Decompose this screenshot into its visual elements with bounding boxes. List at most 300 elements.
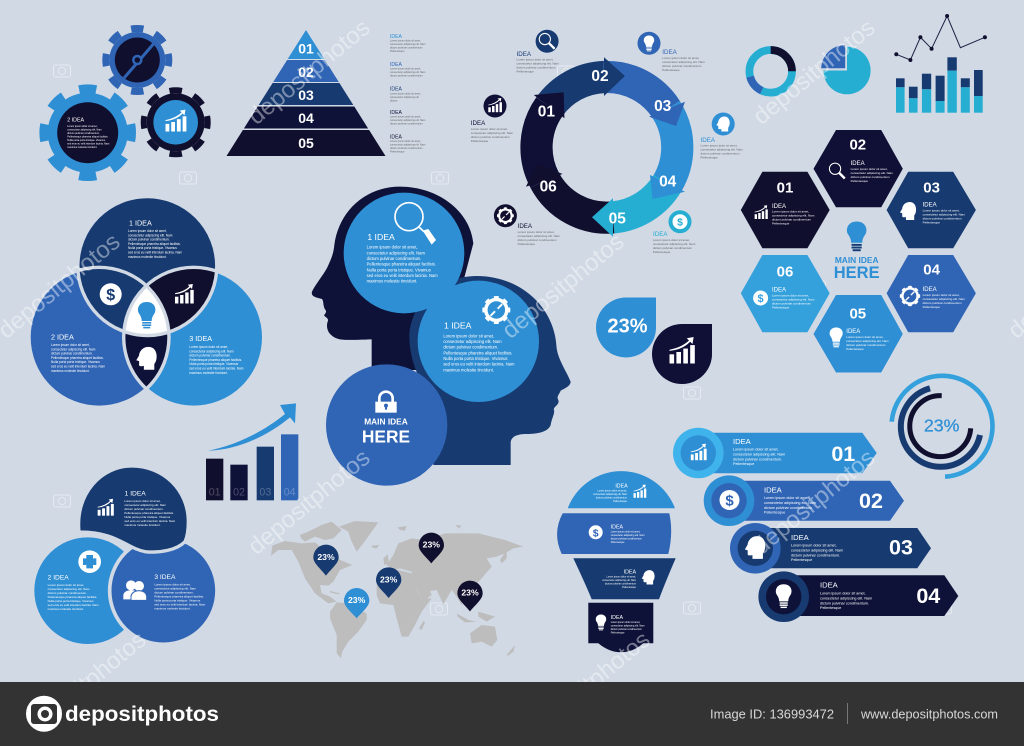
banner 02 [704, 475, 904, 526]
venn text 2: 2 IDEA [51, 332, 74, 342]
bulb: neck [573, 558, 676, 599]
growth bars with arrow: 01 [209, 486, 221, 498]
hexagon centre: main idea: HERE [834, 264, 880, 282]
hexagon diagram [741, 130, 976, 372]
hex 04: IDEA [923, 287, 937, 293]
circle: idea right: dictum pulvinar condimentum. [443, 345, 498, 350]
map pin: south america: 23% [348, 595, 366, 605]
blob 1 text: maximus molestie tincidunt. [124, 523, 161, 527]
bulb: dome: IDEA [615, 484, 628, 490]
hex 06: Pellentesque [772, 306, 790, 310]
pyramid labels: dictum pulvinar condimentum [390, 147, 423, 150]
hex 04: consectetur adipiscing elit. Nam [923, 297, 965, 301]
gear: big with text [44, 89, 132, 177]
callout: bulb: IDEA [662, 49, 678, 56]
hex 04: Pellentesque [923, 305, 940, 309]
banner 03: IDEA [791, 533, 810, 542]
teardrop percentage: 23% [607, 316, 648, 338]
callout: magnifier: consectetur adipiscing elit. Nam [516, 62, 559, 66]
hex 02: 02 [849, 137, 866, 154]
left head silhouette [312, 187, 473, 370]
hex 06 [741, 255, 830, 332]
watermarks: depositphotos [523, 626, 655, 742]
venn text 2: Pellentesque pharetra aliquet facilisis. [51, 356, 104, 360]
callout: chart [471, 94, 514, 143]
hex 01: dictum pulvinar condimentum [772, 218, 812, 222]
pyramid labels: dictum pulvinar condimentum [390, 122, 423, 126]
hex 04: 04 [923, 262, 941, 279]
map pin: africa: 23% [380, 575, 398, 585]
callout: magnifier [516, 30, 559, 74]
banner 02: Lorem ipsum dolor sit amet, [764, 496, 810, 500]
hex 02 [814, 130, 903, 207]
cycle callouts [471, 30, 743, 254]
blob 2 text: Nulla porta porta tristique. Vivamus [48, 599, 94, 603]
pyramid labels: consectetur adipiscing elit. Nam [390, 43, 425, 46]
hex 02: dictum pulvinar condimentum [851, 175, 890, 179]
callout: dollar: IDEA [653, 231, 668, 238]
blob 3 text: Pellentesque pharetra aliquet facilisis. [154, 594, 204, 598]
circle: main idea: HERE [362, 427, 410, 447]
venn text 3: 3 IDEA [189, 334, 212, 343]
venn text 3: Lorem ipsum dolor sit amet, [189, 345, 228, 349]
banner 02: dictum pulvinar condimentum. [764, 506, 813, 510]
gear: dark with chart [144, 90, 208, 154]
hex 05 [814, 295, 903, 372]
circle: idea top: Lorem ipsum dolor sit amet, [367, 245, 418, 250]
callout: magnifier: Lorem ipsum dolor sit amet, [516, 58, 554, 62]
circle: idea top: maximus molestie tincidunt. [367, 279, 417, 284]
bulb: body: Lorem ipsum dolor sit amet, [611, 530, 641, 534]
bulb: body: dictum pulvinar condimentum [611, 538, 642, 540]
callout: bulb: Pellentesque [662, 68, 680, 72]
circle: idea right: Pellentesque pharetra aliquet facilisis. [443, 350, 513, 355]
gauge 23% [892, 376, 992, 477]
pyramid chart: 04 [298, 110, 314, 126]
circular arrow cycle: 03 [654, 98, 672, 115]
circle: idea top: consectetur adipiscing elit. Nam [367, 250, 425, 255]
right head silhouette [409, 276, 571, 465]
pyramid labels: Lorem ipsum dolor sit amet, [390, 40, 421, 42]
circle: idea right [418, 281, 539, 402]
callout: dollar [653, 210, 696, 254]
banner 01: 01 [831, 442, 855, 466]
growth bars with arrow: 04 [284, 486, 296, 498]
venn text 3: sed eros eu velit interdum lacinia. Nam [189, 366, 244, 370]
banner 02: $ [725, 492, 734, 510]
gear: big with text: consectetur adipiscing elit. Nam [67, 128, 102, 132]
blob 2 text: Lorem ipsum dolor sit amet, [48, 583, 84, 587]
callout: gear [494, 204, 560, 246]
bulb: base: consectetur adipiscing elit. Nam [611, 624, 644, 628]
gear: big with text: dictum pulvinar condimentum. [67, 132, 100, 135]
callout: dollar: dictum pulvinar condimentum [653, 246, 693, 250]
map pin: russia: 23% [423, 540, 440, 550]
venn icons: $ [106, 287, 115, 304]
pyramid labels: IDEA [390, 34, 402, 40]
banner 04: dictum pulvinar condimentum. [820, 601, 869, 605]
banner 02: IDEA [764, 486, 783, 494]
bulb: base [588, 603, 653, 652]
circle: idea top: Nulla porta porta tristique. Vivamus [367, 267, 431, 272]
callout: dollar: Lorem ipsum dolor sit amet, [653, 238, 690, 242]
banner 01 [673, 428, 877, 478]
callout: bulb: consectetur adipiscing elit. Nam [662, 60, 705, 64]
gear: blue compass [106, 28, 169, 92]
bulb: dome: Pellentesque [613, 500, 628, 503]
circle: idea right: maximus molestie tincidunt. [443, 367, 494, 372]
pyramid labels [390, 34, 425, 154]
pyramid labels: dictum [390, 100, 397, 102]
venn text 1: consectetur adipiscing elit. Nam [128, 233, 173, 237]
map pin: south asia: 23% [461, 588, 479, 598]
blob 1 text: consectetur adipiscing elit. Nam [124, 503, 167, 507]
bulb: base: IDEA [611, 615, 624, 621]
bulb: dome: Lorem ipsum dolor sit amet, [598, 490, 627, 492]
gear: big with text: Nulla porta porta tristique. Vivamus [67, 139, 106, 142]
watermarks: depositphotos [243, 444, 375, 560]
callout: bulb: dictum pulvinar condimentum [662, 64, 702, 68]
circular arrow cycle: 06 [540, 179, 557, 196]
hex 05: dictum pulvinar condimentum [846, 343, 886, 347]
hex 06: IDEA [772, 288, 786, 294]
bulb: neck: Pellentesque [622, 586, 637, 589]
circle: idea right: Lorem ipsum dolor sit amet, [443, 333, 494, 338]
watermarks: depositphotos [748, 14, 880, 130]
callout: bulb: Lorem ipsum dolor sit amet, [662, 56, 699, 60]
hex 03: Lorem ipsum dolor sit amet, [923, 208, 960, 212]
circle: idea right: Nulla porta porta tristique. Vivamus [443, 356, 507, 361]
callout: head: Lorem ipsum dolor sit amet, [700, 144, 738, 148]
circle: idea top: sed eros eu velit interdum lacinia. Nam [367, 273, 438, 278]
hex 06: Lorem ipsum dolor sit amet, [772, 294, 809, 298]
callout: chart: consectetur adipiscing elit. Nam [471, 131, 514, 135]
bulb: dome: dictum pulvinar condimentum [596, 496, 627, 500]
blob 3 text: maximus molestie tincidunt. [154, 606, 191, 610]
callout: bulb [638, 32, 705, 72]
hex 03 [887, 172, 976, 248]
pyramid labels: Lorem ipsum dolor sit amet, [390, 140, 421, 143]
hexagon centre: main idea [834, 221, 880, 282]
venn text 3: Pellentesque pharetra aliquet facilisis. [189, 358, 242, 362]
banner 01: dictum pulvinar condimentum. [733, 457, 782, 461]
circular arrow cycle: 01 [538, 103, 555, 120]
hex 04: Lorem ipsum dolor sit amet, [923, 293, 960, 297]
blob 2 text: 2 IDEA [48, 575, 69, 582]
blob 1 text: Pellentesque pharetra aliquet facilisis. [124, 511, 174, 515]
venn text 2: Nulla porta porta tristique. Vivamus [51, 360, 100, 364]
hex 03: dictum pulvinar condimentum [923, 216, 962, 220]
pyramid labels: Lorem ipsum dolor sit amet, [390, 116, 421, 118]
pyramid labels: dictum pulvinar condimentum [390, 46, 423, 50]
banner 02: Pellentesque [764, 511, 785, 515]
venn text 3: consectetur adipiscing elit. Nam [189, 349, 234, 353]
pyramid labels: consectetur adipiscing elit [390, 96, 419, 99]
venn text 1 [128, 218, 182, 259]
pyramid labels: Pellentesque [390, 50, 405, 53]
blob 3 text [123, 574, 206, 610]
map pin: south asia [457, 581, 483, 611]
blob 1 text: Nulla porta porta tristique. Vivamus [124, 515, 171, 519]
circle: main idea [326, 364, 447, 486]
hex 02: Pellentesque [851, 179, 868, 183]
hex 03: IDEA [923, 202, 937, 208]
hex 03: Pellentesque [923, 220, 940, 224]
venn text 2 [51, 332, 105, 373]
banner 04: Lorem ipsum dolor sit amet, [820, 592, 866, 596]
circular arrow cycle [526, 57, 685, 237]
callout: chart: IDEA [471, 120, 486, 127]
banner 03: Lorem ipsum dolor sit amet, [791, 544, 836, 548]
callout: chart: Pellentesque [471, 139, 488, 143]
hex 06: $ [758, 293, 764, 305]
pyramid labels: Lorem ipsum dolor sit amet, [390, 68, 421, 70]
banner 01: Lorem ipsum dolor sit amet, [733, 448, 778, 452]
banner 03: consectetur adipiscing elit. Nam [791, 548, 843, 552]
pyramid labels: dictum pulvinar condimentum [390, 74, 423, 78]
bulb: neck: Lorem ipsum dolor sit amet, [606, 576, 636, 578]
blob 2 text [48, 550, 101, 611]
venn text 1: 1 IDEA [129, 218, 152, 228]
callout: head: IDEA [700, 137, 716, 144]
banner 04: 04 [916, 584, 940, 608]
hex 01 [741, 172, 830, 248]
circle: idea right: 1 IDEA [444, 321, 472, 331]
banner 03: 03 [889, 536, 913, 560]
growth bars with arrow: 02 [233, 486, 245, 498]
blob 3 text: sed eros eu velit interdum lacinia. Nam [154, 602, 206, 606]
gear: big with text: 2 IDEA [67, 118, 85, 124]
pyramid labels: IDEA [390, 62, 402, 68]
bulb: body [557, 513, 671, 554]
venn text 1: Lorem ipsum dolor sit amet, [128, 229, 167, 233]
bulb: neck: consectetur adipiscing elit. Nam [602, 579, 636, 582]
pyramid labels: Lorem ipsum dolor sit amet, [390, 92, 421, 96]
bulb: base: dictum pulvinar condimentum [611, 628, 642, 631]
hex 06: dictum pulvinar condimentum [772, 302, 812, 306]
callout: gear: Pellentesque [518, 242, 535, 246]
callout: magnifier: IDEA [516, 51, 532, 58]
bulb: neck: IDEA [624, 570, 636, 576]
hexagon centre: main idea: MAIN IDEA [835, 255, 879, 265]
pyramid chart: 05 [298, 135, 314, 151]
watermarks: depositphotos [243, 14, 375, 130]
circle: idea top: 1 IDEA [367, 232, 395, 242]
banner 02: 02 [859, 489, 883, 513]
footer logo icon [26, 696, 62, 732]
hex 05: IDEA [846, 329, 860, 335]
map pin: africa [376, 567, 401, 598]
blob 2 text: Pellentesque pharetra aliquet facilisis. [48, 595, 97, 599]
blob 3 text: consectetur adipiscing elit. Nam [154, 586, 197, 590]
hex 04 [887, 255, 976, 332]
callout: chart: dictum pulvinar condimentum [471, 135, 510, 139]
growth bars with arrow [206, 403, 298, 500]
banner 03: Pellentesque [791, 558, 812, 562]
circle: idea right: sed eros eu velit interdum lacinia. Nam [443, 362, 515, 367]
bulb: body: Pellentesque [611, 541, 625, 544]
hex 03: 03 [923, 180, 940, 197]
lower-left group in zoom coordinates [34, 403, 523, 658]
venn diagram [29, 196, 264, 407]
three blob diagram [34, 466, 217, 644]
banner 04: Pellentesque [820, 606, 841, 610]
callout: gear: Lorem ipsum dolor sit amet, [518, 230, 555, 234]
circle: idea top [344, 193, 464, 313]
circle: main idea: MAIN IDEA [364, 417, 408, 427]
teardrop chart icon [652, 324, 712, 384]
circle: idea top: dictum pulvinar condimentum. [367, 256, 421, 261]
pyramid labels: IDEA [390, 110, 402, 116]
banner 01: IDEA [733, 437, 752, 446]
blob 1 text: Lorem ipsum dolor sit amet, [124, 499, 161, 503]
callout: gear: dictum pulvinar condimentum [518, 238, 557, 242]
callout: magnifier: Pellentesque [516, 70, 534, 74]
banner 04: IDEA [820, 580, 839, 590]
hex 02: IDEA [851, 161, 865, 167]
callout: dollar: $ [677, 216, 683, 228]
map pin: north america: 23% [317, 552, 335, 562]
circle: idea top: Pellentesque pharetra aliquet facilisis. [367, 262, 436, 267]
world map [271, 521, 523, 658]
footer image id: Image ID: 136993472 [710, 708, 834, 722]
pyramid chart [226, 30, 386, 156]
callout: head: dictum pulvinar condimentum [700, 152, 740, 156]
footer logo text: depositphotos [65, 702, 219, 726]
map pin: south america [344, 588, 369, 618]
footer site url: www.depositphotos.com [860, 708, 998, 722]
callout: head [700, 112, 743, 160]
hex 02: consectetur adipiscing elit. Nam [851, 171, 893, 175]
hex 01: 01 [777, 180, 793, 197]
callout: head: Pellentesque [700, 156, 718, 160]
footer bar [0, 682, 1024, 746]
blob 2 text: maximus molestie tincidunt. [48, 607, 84, 611]
pyramid labels: Pellentesque [390, 150, 405, 154]
bulb: base: Lorem ipsum dolor sit amet, [611, 621, 641, 624]
circular arrow cycle: 04 [659, 174, 677, 191]
banner 03 [730, 523, 931, 574]
hex 06: consectetur adipiscing elit. Nam [772, 298, 815, 302]
gear: big with text: sed eros eu velit interdum lacinia. Nam [67, 142, 109, 146]
bulb: base: Pellentesque [611, 632, 625, 634]
banner 02: consectetur adipiscing elit. Nam [764, 501, 816, 505]
pyramid chart: 01 [298, 40, 314, 56]
pyramid labels: consectetur adipiscing elit. Nam [390, 71, 425, 74]
venn text 3: dictum pulvinar condimentum. [189, 354, 231, 358]
venn text 3: Nulla porta porta tristique. Vivamus [189, 362, 239, 366]
gears cluster [44, 28, 208, 177]
watermarks: depositphotos [748, 444, 880, 560]
hex 05: Lorem ipsum dolor sit amet, [846, 335, 883, 339]
venn text 2: Lorem ipsum dolor sit amet, [51, 343, 90, 347]
two heads diagram [312, 187, 571, 486]
hex 01: IDEA [772, 204, 786, 210]
gauge 23%: 23% [924, 416, 960, 436]
donut chart [749, 50, 792, 93]
circle: idea right: consectetur adipiscing elit. Nam [443, 339, 502, 344]
map pin: north america [313, 545, 339, 576]
blob 1 text: 1 IDEA [125, 491, 146, 498]
hex 01: Lorem ipsum dolor sit amet, [772, 210, 809, 214]
venn text 2: maximus molestie tincidunt. [51, 369, 90, 373]
blob 2 text: dictum pulvinar condimentum. [48, 591, 87, 595]
blob 3 text: Nulla porta porta tristique. Vivamus [154, 598, 201, 602]
blob 1 text [98, 491, 176, 527]
hex 03: consectetur adipiscing elit. Nam [923, 212, 965, 216]
banner 03: dictum pulvinar condimentum. [791, 553, 840, 557]
pyramid labels: consectetur adipiscing elit. Nam [390, 144, 425, 146]
banner 01: Pellentesque [733, 462, 754, 466]
hex 04: dictum pulvinar condimentum [923, 301, 962, 305]
pyramid chart: 03 [298, 87, 314, 103]
venn text 3: maximus molestie tincidunt. [189, 371, 228, 375]
blob 1 text: dictum pulvinar condimentum. [124, 507, 164, 511]
blob 2 text: sed eros eu velit interdum lacinia. Nam [48, 603, 99, 607]
venn text 2: sed eros eu velit interdum lacinia. Nam [51, 364, 105, 368]
venn text 1: maximus molestie tincidunt. [128, 255, 167, 259]
gear: big with text: Lorem ipsum dolor sit amet, [67, 125, 98, 128]
pyramid chart: 02 [298, 64, 314, 80]
growth bars with arrow: 03 [259, 486, 271, 498]
callout: chart: Lorem ipsum dolor sit amet, [471, 127, 508, 131]
venn text 2: dictum pulvinar condimentum. [51, 352, 93, 356]
pyramid labels: IDEA [390, 87, 402, 93]
circular arrow cycle: 05 [609, 210, 626, 227]
blob 3 text: Lorem ipsum dolor sit amet, [154, 582, 191, 586]
venn text 3 [189, 334, 244, 375]
bulb: dome [568, 471, 675, 508]
hex 05: consectetur adipiscing elit. Nam [846, 339, 889, 343]
banner 04 [758, 571, 958, 622]
pie chart [821, 45, 871, 94]
watermarks: depositphotos [19, 626, 151, 742]
venn text 1: sed eros eu velit interdum lacinia. Nam [128, 250, 182, 254]
hex 05: 05 [849, 306, 866, 323]
callout: dollar: consectetur adipiscing elit. Nam [653, 242, 696, 246]
gear: big with text: Pellentesque pharetra aliquet facilisis. [67, 136, 109, 138]
map pin: russia [419, 533, 444, 563]
blob 3 text: dictum pulvinar condimentum. [154, 590, 194, 594]
blob 2 text: consectetur adipiscing elit. Nam [48, 587, 90, 591]
callout: dollar: Pellentesque [653, 250, 671, 254]
callout: gear: IDEA [518, 223, 533, 230]
bulb: body: consectetur adipiscing elit. Nam [611, 534, 644, 537]
hex 01: Pellentesque [772, 222, 790, 226]
venn text 1: dictum pulvinar condimentum. [128, 238, 170, 242]
bulb: body: IDEA [611, 525, 624, 531]
stacked bars with line [894, 14, 987, 113]
callout: head: consectetur adipiscing elit. Nam [700, 148, 743, 152]
venn icons [100, 283, 194, 370]
venn text 1: Nulla porta porta tristique. Vivamus [128, 246, 177, 250]
bulb: body: $ [593, 527, 599, 539]
gear: big with text: maximus molestie tincidunt. [67, 146, 98, 149]
venn text 1: Pellentesque pharetra aliquet facilisis. [128, 242, 181, 246]
hex 05: Pellentesque [846, 347, 864, 351]
venn text 2: consectetur adipiscing elit. Nam [51, 347, 96, 351]
callout: magnifier: dictum pulvinar condimentum [516, 66, 556, 70]
bulb stacked diagram [557, 471, 676, 652]
banner 04: consectetur adipiscing elit. Nam [820, 596, 872, 600]
watermarks: depositphotos [497, 228, 629, 344]
circular arrow cycle: 02 [591, 68, 609, 85]
pyramid labels: consectetur adipiscing elit. Nam [390, 119, 425, 122]
banner 01: consectetur adipiscing elit. Nam [733, 452, 785, 456]
pyramid labels: IDEA [390, 134, 402, 140]
bulb: neck: dictum pulvinar condimentum [605, 582, 636, 586]
blob 1 text: sed eros eu velit interdum lacinia. Nam [124, 519, 176, 523]
